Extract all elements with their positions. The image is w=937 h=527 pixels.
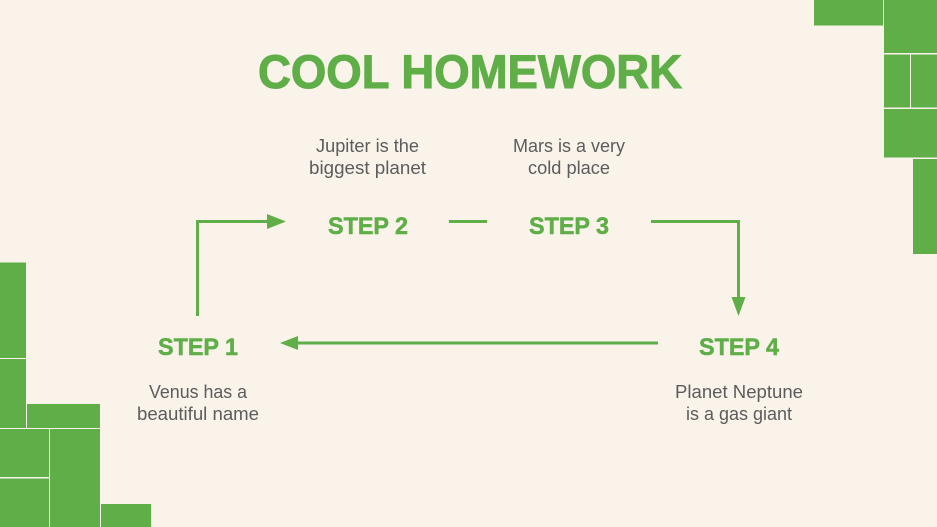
title: COOL HOMEWORK [258,45,682,98]
arrow: step 1 to step 2 [198,214,286,316]
heading: step 1: STEP 1 [158,334,238,361]
connector: step 2 to step 3 [449,220,487,223]
description: step 4 [675,381,803,424]
arrow: step 3 to step 4 [651,222,746,316]
description: step 1: Venus has a [149,381,248,402]
description: step 1 [137,381,259,424]
heading: step 4: STEP 4 [699,334,780,361]
description: step 4: is a gas giant [686,403,792,424]
description: step 2: biggest planet [309,157,426,178]
description: step 3: cold place [528,157,610,178]
decoration: bottom-left green blocks [0,262,151,527]
description: step 3 [513,135,626,178]
description: step 2 [309,135,426,178]
description: step 2: Jupiter is the [316,135,419,156]
description: step 1: beautiful name [137,403,259,424]
description: step 3: Mars is a very [513,135,626,156]
decoration: top-right green blocks [814,0,937,254]
description: step 4: Planet Neptune [675,381,803,402]
arrow: step 4 to step 1 [280,336,658,350]
heading: step 3: STEP 3 [529,213,609,240]
heading: step 2: STEP 2 [328,213,408,240]
